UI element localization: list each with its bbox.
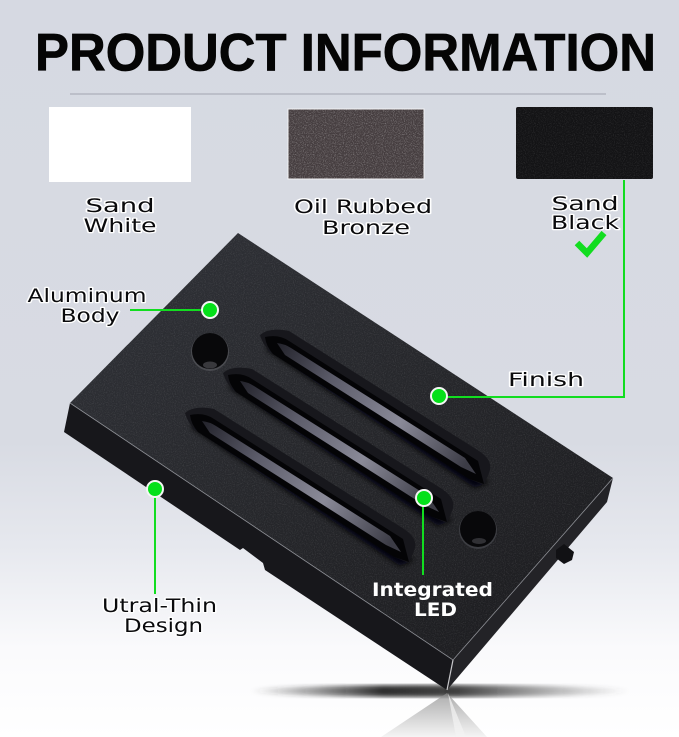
floor reflection [381, 693, 487, 737]
swatch: sand black [516, 107, 653, 234]
callout: integrated LED [372, 490, 493, 621]
LED slot: middle [223, 368, 453, 526]
callout: aluminum body: Aluminum [28, 285, 146, 307]
side button [556, 544, 574, 564]
divider [70, 93, 606, 95]
label: sand black: Sand [552, 193, 618, 215]
callout: finish [431, 180, 624, 404]
title: PRODUCT INFORMATION [35, 24, 656, 82]
label: sand black: Black [551, 212, 619, 234]
callout: ultra-thin design: Design [124, 615, 203, 637]
LED slot: top [260, 330, 490, 488]
label: oil rubbed bronze: Oil Rubbed [294, 196, 432, 218]
label: sand white: White [84, 215, 156, 237]
callout: integrated LED: LED [414, 599, 457, 621]
callout: aluminum body [28, 285, 218, 327]
callout: ultra-thin design: Utral-Thin [102, 595, 217, 617]
front side face [64, 403, 453, 690]
callout: finish: Finish [508, 369, 584, 391]
callout: aluminum body: Body [60, 305, 120, 327]
swatch: sand white [49, 107, 191, 237]
label: sand white [84, 195, 156, 237]
edge highlight [70, 403, 613, 660]
callout: ultra-thin design [102, 481, 217, 637]
label: sand black [551, 193, 619, 234]
callout: integrated LED: Integrated [372, 579, 493, 601]
top face [70, 233, 613, 660]
floor shadow [250, 685, 630, 697]
LED slot: bottom [185, 408, 415, 566]
swatch: oil rubbed bronze [288, 109, 432, 239]
product: LED step light plate [64, 233, 613, 690]
right side face [447, 478, 613, 690]
icon: green check mark [577, 233, 604, 253]
label: sand white: Sand [86, 195, 154, 217]
mounting hole: left [191, 333, 229, 371]
label: oil rubbed bronze: Bronze [322, 217, 410, 239]
label: oil rubbed bronze [294, 196, 432, 239]
mounting hole: right [459, 511, 497, 549]
